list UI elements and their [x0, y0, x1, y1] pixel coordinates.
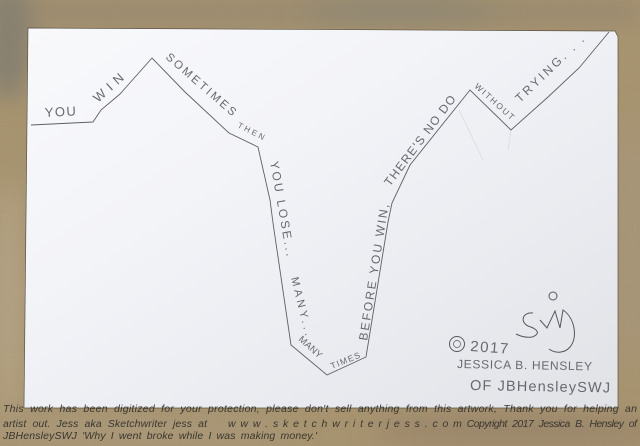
path label: MANY...: MANY...	[288, 276, 314, 337]
copyright notice: artist out. Jess aka Sketchwriter jess at	[3, 418, 208, 430]
path label: THERE'S NO DO: THERE'S NO DO	[381, 93, 459, 189]
path label: WIN: WIN	[90, 70, 127, 105]
path label: TRYING...: TRYING. . .	[512, 33, 587, 105]
path label: THEN: THEN	[236, 121, 266, 142]
path label: YOU: YOU	[44, 103, 76, 120]
copyright notice	[2, 403, 638, 442]
artist name: JESSICA B. HENSLEY	[457, 357, 592, 373]
path label: TIMES: TIMES	[329, 350, 362, 371]
path label: WITHOUT: WITHOUT	[473, 81, 517, 122]
line chart: hand-drawn ups and downs path	[31, 32, 609, 375]
signature: SWJ monogram	[516, 292, 574, 352]
paper sheet	[24, 28, 618, 408]
faint pencil guide marks	[459, 110, 511, 160]
copyright notice: w w w . s k e t c h w r i t e r j e s s . c o m Copyright 2017 Jessica B. Hensley of	[228, 418, 638, 430]
copyright notice: JBHensleySWJ 'Why I went broke while I was making money.'	[2, 430, 318, 442]
copyright: 2017	[450, 336, 509, 358]
path label: SOMETIMES: SOMETIMES	[163, 51, 238, 119]
path label: MANY: MANY	[296, 334, 325, 361]
path label: BEFORE YOU WIN,: BEFORE YOU WIN,	[356, 203, 392, 341]
copyright: 2017: 2017	[470, 338, 509, 358]
copyright notice: This work has been digitized for your protection, please don't sell anything from this artwork, Thank you for helping an	[3, 403, 637, 415]
artist handle: OF JBHensleySWJ	[470, 378, 610, 396]
path label: YOU LOSE...: YOU LOSE...	[267, 160, 298, 257]
